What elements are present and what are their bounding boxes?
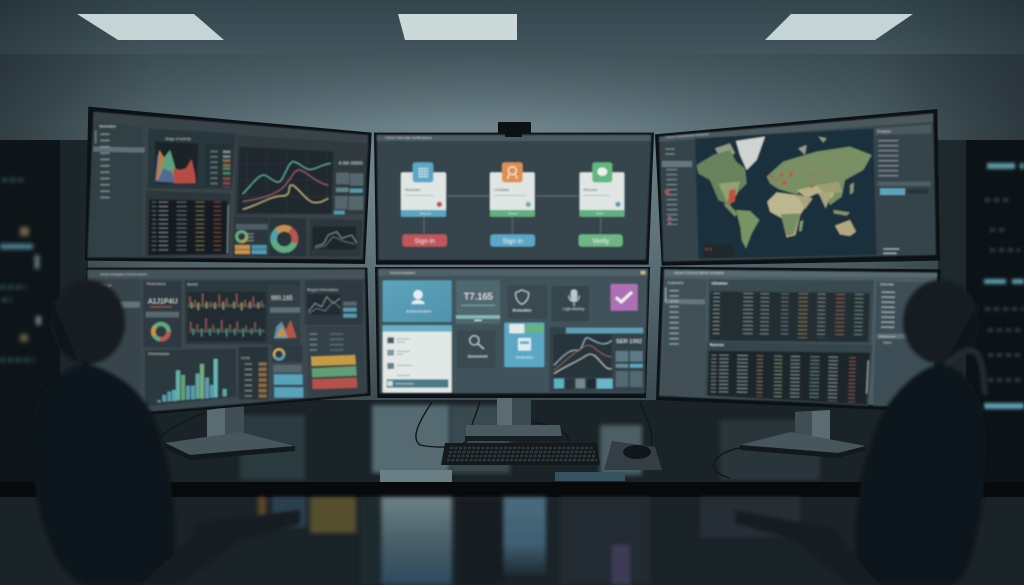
greenland [736, 137, 765, 170]
sidebar: Settings [98, 283, 112, 287]
north america [697, 150, 747, 205]
button: verify green [579, 234, 623, 247]
shield tile [508, 285, 547, 319]
sidebar [87, 121, 145, 257]
arctic islands [715, 137, 827, 160]
KPI panel [143, 281, 182, 348]
sparkline panel: Bursts [187, 283, 198, 287]
card 2: Submit [508, 212, 518, 216]
top-centre monitor [374, 133, 654, 265]
performance bar chart: Performance [148, 352, 169, 356]
map legend [703, 244, 733, 258]
back wall [0, 0, 1024, 414]
desk back area and wall reflection [88, 400, 948, 485]
card 3: Verify [596, 212, 604, 216]
donut tile [272, 345, 303, 372]
south america [736, 210, 759, 248]
upper table: Utilization [712, 282, 728, 286]
KPI and area panel [268, 286, 300, 342]
KPI and area panel: 990.165 [271, 296, 293, 302]
login list card: Authentication [395, 381, 415, 385]
right sidebar: Status [883, 340, 892, 344]
button: sign in red [402, 234, 447, 247]
ceiling light right [765, 14, 913, 40]
bottom-centre monitor: Home Analytics [390, 271, 415, 275]
right sidebar [873, 281, 935, 408]
sidebar [661, 279, 707, 397]
small line panel: Region Information [307, 288, 338, 292]
right server rack [938, 140, 1024, 485]
ceiling light centre [398, 14, 517, 40]
area chart panel: Stage of activity [165, 137, 191, 141]
small line chart panel [309, 218, 363, 257]
shield tile: Restoration [513, 309, 531, 313]
hotspots [769, 172, 823, 188]
top-centre monitor: Home Visit data Notifications [385, 136, 432, 140]
microphone tile: Login Attorney [563, 307, 585, 311]
status bars panel [307, 327, 366, 397]
right sidebar: Preferences [879, 334, 896, 338]
button: sign in red: Sign in [414, 238, 435, 245]
bottom-left monitor [86, 268, 371, 422]
button: verify green: Verify [592, 238, 610, 245]
card 1: Resume [420, 212, 431, 216]
left monitor stand [165, 405, 295, 460]
madagascar [799, 220, 803, 231]
search tile: Assessment [468, 354, 488, 358]
europe and asia [767, 147, 872, 205]
list panel [238, 347, 268, 399]
india and arabia [797, 192, 832, 209]
bottom-right monitor [656, 267, 941, 412]
upper table [707, 279, 874, 344]
right chair [735, 280, 986, 585]
KPI panel: A1J1P4U [148, 298, 178, 305]
right sidebar: Overview [880, 282, 894, 286]
KPI panel: Performance [147, 282, 166, 286]
right monitor stand [740, 410, 866, 458]
small line panel [305, 280, 363, 325]
login list card [383, 325, 452, 393]
check tile [611, 284, 638, 311]
central america [724, 202, 737, 217]
bottom-right monitor: Home Connect Metric Analysis [674, 271, 724, 275]
card 1: Resolution [405, 188, 421, 192]
left map sidebar [660, 140, 698, 261]
desk front edge [0, 482, 1024, 497]
top-right monitor: Home Dashboard Analysis [666, 132, 709, 139]
blue action buttons [274, 374, 303, 398]
table panel [145, 191, 231, 257]
sidebar [90, 280, 141, 418]
africa [767, 192, 807, 237]
right map sidebar: Analysis [877, 129, 891, 133]
sparkline panel [185, 280, 300, 344]
left chair [31, 280, 300, 585]
reflective desk surface [0, 497, 1024, 585]
cables [150, 402, 740, 478]
bottom-centre monitor [375, 267, 650, 398]
authentication tile: Authentication [406, 309, 431, 314]
top-left monitor [85, 107, 372, 264]
area chart panel [148, 128, 236, 189]
analytics panel [549, 327, 645, 392]
line chart panel: 4:98 0650 [338, 160, 363, 166]
map legend: R-S [705, 246, 712, 251]
small donut panel [233, 217, 269, 257]
map [695, 128, 877, 259]
KPI tile [456, 280, 500, 324]
card 3: Welcome [583, 188, 597, 192]
analytics panel: SER 1992 [616, 339, 642, 345]
australia [835, 220, 856, 236]
card 3 [580, 162, 624, 217]
webcam [498, 122, 531, 137]
keyboard [441, 443, 600, 465]
card 2: Candidate [494, 188, 509, 192]
south-east asia islands [833, 182, 854, 216]
list panel: SUITE [241, 356, 250, 360]
KPI tile: T7.165 [464, 292, 493, 302]
lower table: Revenue [710, 343, 724, 347]
search tile [457, 330, 496, 368]
verification tile [504, 323, 544, 367]
button: sign in blue: Sign in [502, 238, 523, 245]
verification tile: Verification [515, 356, 533, 360]
button: sign in blue [490, 234, 535, 247]
card 1 [401, 162, 446, 217]
right map sidebar [874, 122, 935, 256]
sidebar: Overview [99, 124, 116, 128]
performance bar chart [145, 348, 237, 407]
card 2 [490, 162, 535, 217]
authentication tile [383, 280, 452, 322]
left server rack [0, 140, 88, 485]
top-right monitor [655, 109, 940, 266]
ceiling light left [77, 14, 224, 40]
ceiling [0, 0, 1024, 56]
line chart panel [234, 135, 369, 216]
central monitor stand [465, 398, 562, 441]
lower table [705, 342, 873, 406]
large donut panel [269, 217, 307, 257]
sidebar: Customers [667, 281, 684, 285]
bottom-left monitor: Home Analytics Performance [100, 272, 147, 276]
microphone tile [552, 286, 589, 321]
mouse pad and mouse [604, 441, 662, 470]
